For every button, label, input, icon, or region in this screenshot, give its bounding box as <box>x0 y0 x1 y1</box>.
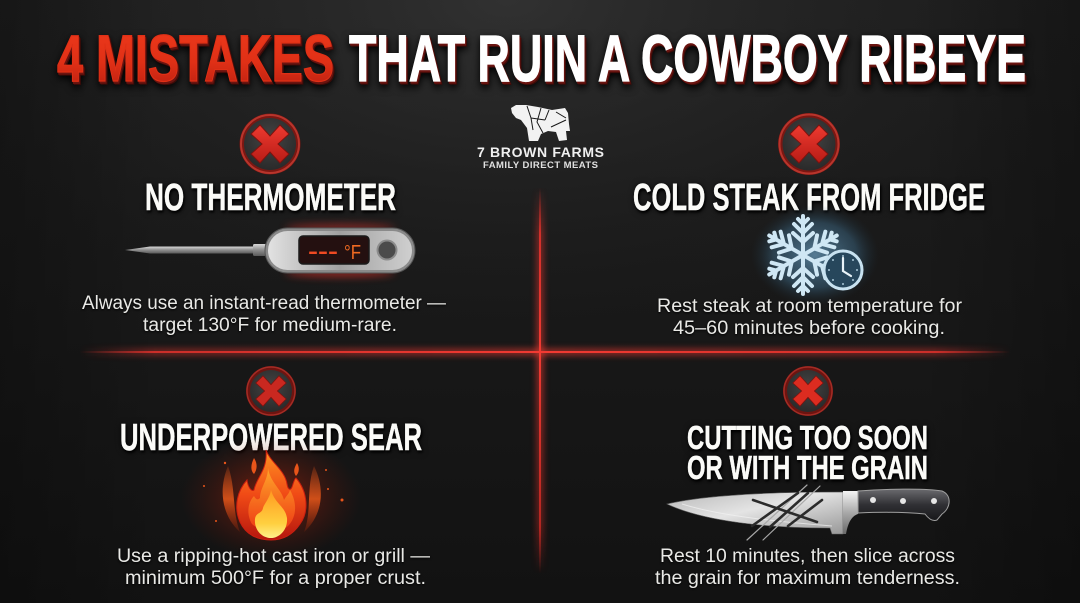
icon: thermometer: °F <box>344 242 361 264</box>
description <box>117 546 430 589</box>
icon: flame <box>181 436 361 560</box>
description: target 130°F for medium-rare. <box>143 315 397 336</box>
description: Rest 10 minutes, then slice across <box>660 546 955 567</box>
icon: scored chef knife <box>667 485 949 540</box>
title <box>57 21 1026 95</box>
icon: thermometer: --- <box>308 241 338 263</box>
panel: cutting too soon <box>655 366 960 589</box>
description: minimum 500°F for a proper crust. <box>125 568 426 589</box>
heading: CUTTING TOO SOON <box>687 419 928 456</box>
icon: thermometer <box>125 224 415 277</box>
logo: 7 Brown Farms <box>477 105 604 171</box>
description <box>655 546 960 589</box>
description: 45–60 minutes before cooking. <box>673 318 945 339</box>
panel: underpowered sear <box>117 366 430 589</box>
tagline: FAMILY DIRECT MEATS <box>483 160 598 171</box>
description: Always use an instant-read thermometer — <box>82 293 446 314</box>
description <box>82 293 446 336</box>
icon: red X badge <box>783 366 833 416</box>
panel: no thermometer <box>82 114 446 336</box>
description: Use a ripping-hot cast iron or grill — <box>117 546 430 567</box>
title: 4 MISTAKES <box>57 21 334 95</box>
red cross divider <box>80 188 1010 573</box>
brand name: 7 BROWN FARMS <box>477 144 604 160</box>
icon: red X badge <box>778 113 840 175</box>
heading: OR WITH THE GRAIN <box>687 449 928 486</box>
panel: cold steak from fridge <box>633 113 985 339</box>
description: the grain for maximum tenderness. <box>655 568 960 589</box>
icon: cow <box>511 105 570 141</box>
icon: red X badge <box>240 114 300 174</box>
description: Rest steak at room temperature for <box>657 296 963 317</box>
icon: snowflake and clock <box>751 205 879 305</box>
heading <box>687 419 928 486</box>
heading: NO THERMOMETER <box>145 177 396 219</box>
description <box>657 296 963 339</box>
heading: UNDERPOWERED SEAR <box>120 417 422 459</box>
icon: red X badge <box>246 366 296 416</box>
